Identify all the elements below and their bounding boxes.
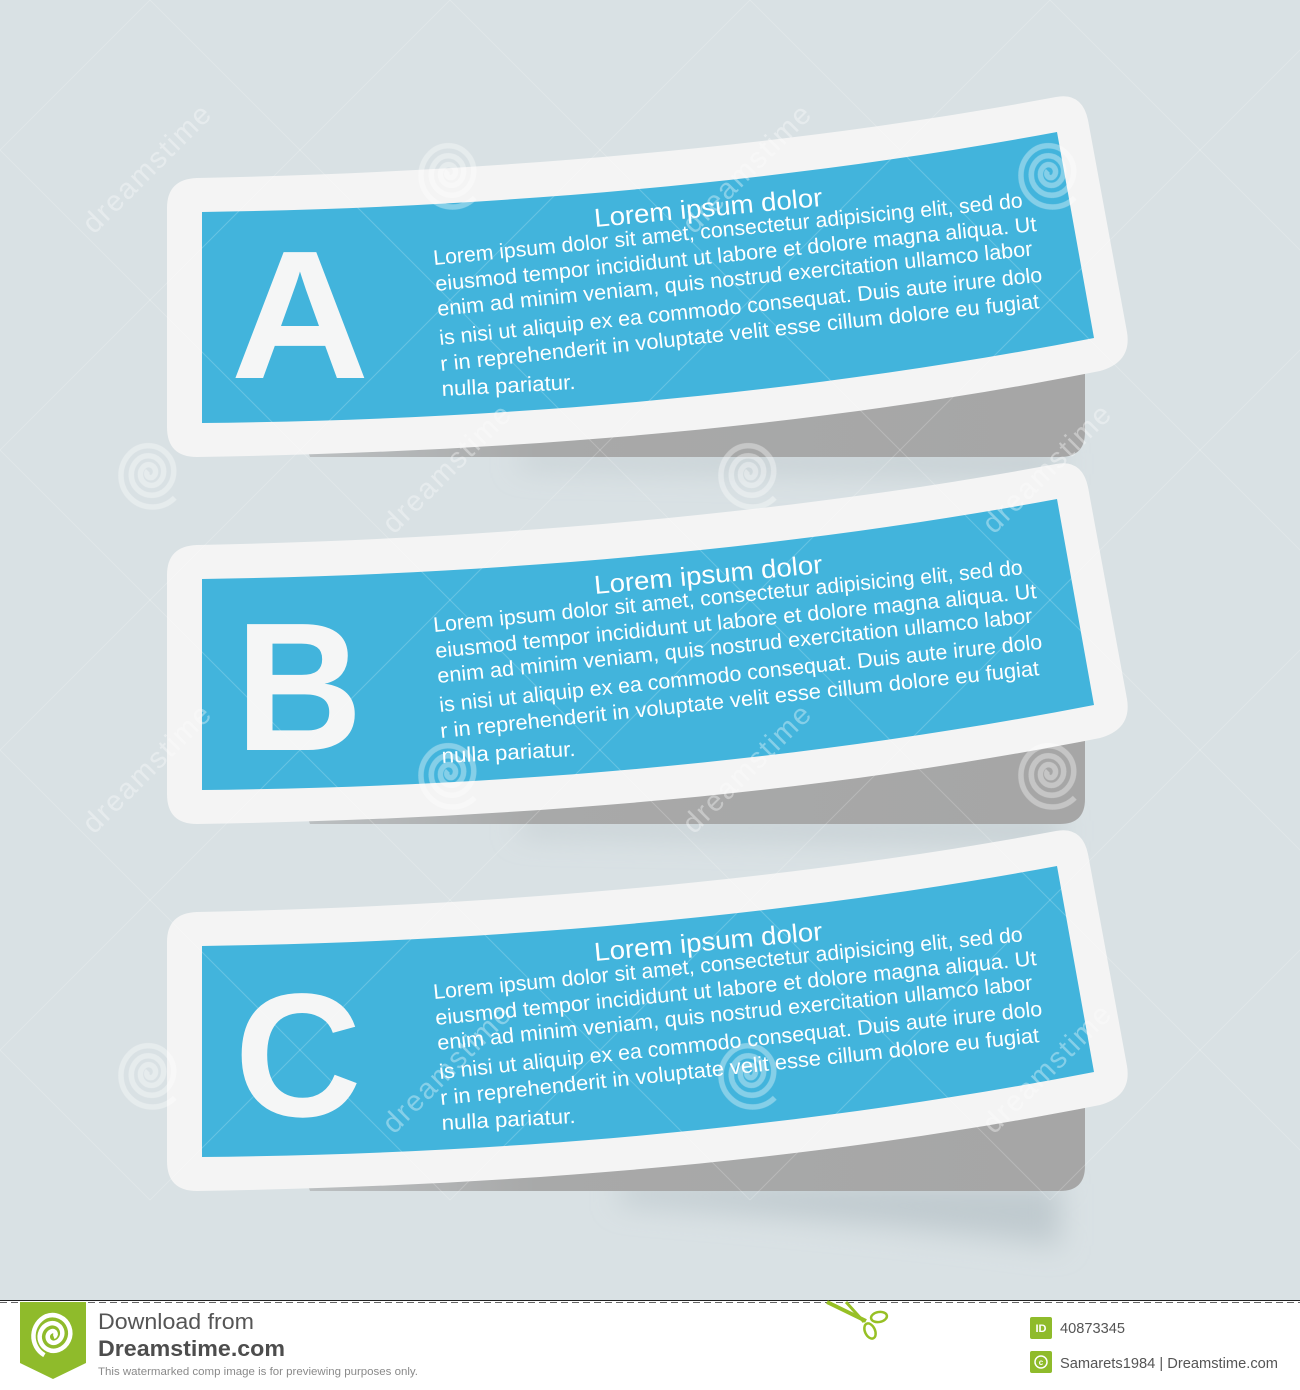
watermark overlay: dreamstime: [76, 99, 218, 240]
icon: id badge: [1030, 1317, 1052, 1339]
label: sticker B: [167, 463, 1128, 824]
fold: sticker B: [300, 739, 1085, 824]
icon: scissors: [827, 1302, 888, 1340]
body text: sticker C: is nisi ut aliquip ex ea commodo consequat. Duis aute irure dolo: [438, 998, 1043, 1084]
body text: sticker C: [432, 923, 1043, 1135]
body text: sticker B: eiusmod tempor incididunt ut labore et dolore magna aliqua. Ut: [434, 580, 1038, 663]
sticker A: [167, 96, 1128, 476]
text: dreamstime.com: Dreamstime.com: [98, 1336, 285, 1361]
blue panel: sticker C: [202, 866, 1094, 1157]
label: sticker C: [167, 830, 1128, 1191]
blue panel: sticker B: [202, 499, 1094, 790]
sticker C: [167, 830, 1128, 1246]
heading: sticker C: Lorem ipsum dolor: [593, 916, 824, 967]
letter C: C: [234, 958, 362, 1154]
body text: sticker C: Lorem ipsum dolor sit amet, consectetur adipisicing elit, sed do: [432, 923, 1024, 1004]
text: image id: 40873345: [1060, 1321, 1125, 1337]
watermark overlay: dreamstime: [76, 699, 218, 840]
heading: sticker A: Lorem ipsum dolor: [593, 182, 824, 233]
watermark overlay: dreamstime: [376, 399, 518, 540]
body text: sticker C: enim ad minim veniam, quis nostrud exercitation ullamco labor: [436, 972, 1033, 1055]
body text: sticker A: nulla pariatur.: [441, 371, 576, 401]
body text: sticker B: r in reprehenderit in voluptate velit esse cillum dolore eu fugiat: [439, 657, 1040, 743]
icon: green badge: [20, 1302, 86, 1379]
body text: sticker B: is nisi ut aliquip ex ea commodo consequat. Duis aute irure dolo: [438, 631, 1043, 717]
body text: sticker B: Lorem ipsum dolor sit amet, consectetur adipisicing elit, sed do: [432, 556, 1024, 637]
icon: copyright badge: c: [1039, 1358, 1044, 1367]
body text: sticker A: eiusmod tempor incididunt ut labore et dolore magna aliqua. Ut: [434, 213, 1038, 296]
body text: sticker B: nulla pariatur.: [441, 738, 576, 768]
text: download from: Download from: [98, 1309, 254, 1334]
shadow: sticker A: [520, 452, 1060, 476]
body text: sticker B: [432, 556, 1043, 768]
icon: id badge: ID: [1036, 1323, 1047, 1335]
watermark overlay: dreamstime: [976, 399, 1118, 540]
footer bar: [0, 1300, 1300, 1390]
letter A: A: [231, 212, 369, 417]
sticker B: [167, 463, 1128, 843]
body text: sticker A: Lorem ipsum dolor sit amet, consectetur adipisicing elit, sed do: [432, 189, 1024, 270]
body text: sticker C: nulla pariatur.: [441, 1105, 576, 1135]
body text: sticker C: r in reprehenderit in voluptate velit esse cillum dolore eu fugiat: [439, 1024, 1040, 1110]
text: credit: Samarets1984 | Dreamstime.com: [1060, 1356, 1278, 1372]
icon: copyright badge: [1030, 1351, 1052, 1373]
blue panel: sticker A: [202, 132, 1094, 423]
fold: sticker A: [300, 372, 1085, 457]
fold: sticker C: [300, 1106, 1085, 1191]
label: sticker A: [167, 96, 1128, 457]
body text: sticker C: eiusmod tempor incididunt ut labore et dolore magna aliqua. Ut: [434, 947, 1038, 1030]
body text: sticker A: enim ad minim veniam, quis nostrud exercitation ullamco labor: [436, 238, 1033, 321]
watermark overlay: dreamstime: [376, 999, 518, 1140]
letter B: B: [235, 585, 363, 790]
body text: sticker B: enim ad minim veniam, quis nostrud exercitation ullamco labor: [436, 605, 1033, 688]
body text: sticker A: r in reprehenderit in voluptate velit esse cillum dolore eu fugiat: [439, 290, 1040, 376]
shadow: sticker C: [620, 1184, 1060, 1246]
watermark overlay: dreamstime: [676, 699, 818, 840]
text: preview notice: This watermarked comp image is for previewing purposes only.: [98, 1366, 418, 1378]
shadow: sticker B: [520, 819, 1060, 843]
body text: sticker A: [432, 189, 1043, 401]
watermark overlay: dreamstime: [976, 999, 1118, 1140]
heading: sticker B: Lorem ipsum dolor: [593, 549, 824, 600]
body text: sticker A: is nisi ut aliquip ex ea commodo consequat. Duis aute irure dolo: [438, 264, 1043, 350]
watermark overlay: dreamstime: [676, 99, 818, 240]
